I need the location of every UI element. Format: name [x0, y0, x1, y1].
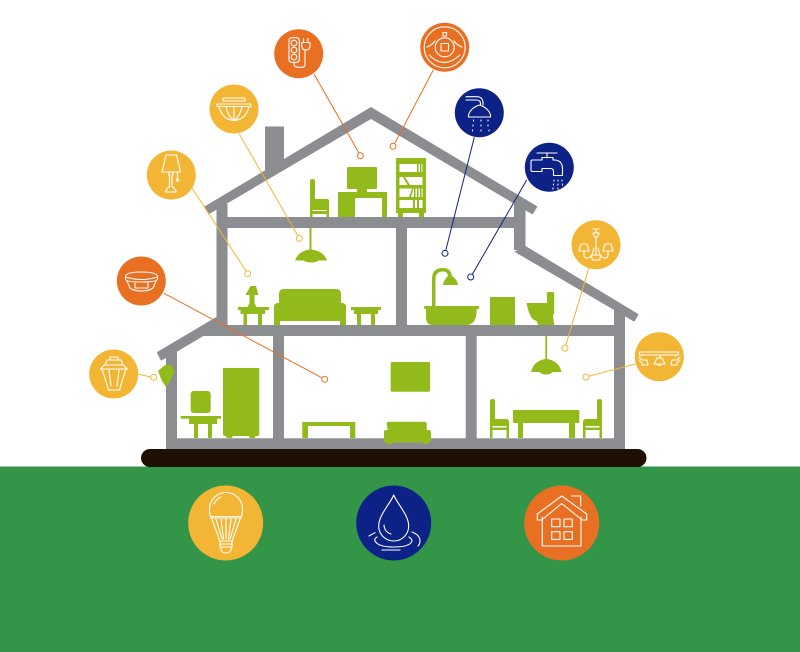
- bedroom table: [181, 416, 221, 438]
- connector: track light: [583, 364, 635, 380]
- connector: smoke detector: [164, 293, 328, 382]
- bathtub with shower: [424, 268, 479, 325]
- icon: wall lantern: [89, 350, 138, 398]
- ground floor furniture: [158, 362, 431, 444]
- foundation: dark base bar: [141, 449, 646, 467]
- attic furniture: [310, 158, 426, 217]
- icon: chandelier: [572, 220, 620, 269]
- ceiling lamp: [295, 228, 327, 262]
- right chair: [583, 399, 602, 438]
- bathroom fixtures: [424, 268, 554, 325]
- connector: ceiling lamp: [239, 134, 302, 241]
- icon: smoke detector: [117, 256, 166, 306]
- connector: faucet: [468, 180, 527, 280]
- ground: green lawn: [0, 466, 800, 652]
- bookshelf: [396, 158, 426, 217]
- icon: ceiling lamp: [210, 84, 258, 134]
- connector lines with end markers: [139, 70, 635, 382]
- connector: chandelier: [562, 268, 589, 351]
- connector: robot vacuum: [390, 70, 433, 149]
- icon: track light: [635, 332, 684, 381]
- connector: shower: [442, 137, 474, 256]
- icon: water drop: [356, 486, 431, 560]
- coffee table: [302, 422, 355, 438]
- dining room furniture: [490, 336, 602, 438]
- second floor living room furniture: [238, 228, 381, 325]
- icon: house: [524, 486, 599, 560]
- connector: wall lantern: [139, 374, 157, 380]
- icon: faucet: [525, 143, 574, 192]
- icon: shower: [455, 88, 504, 137]
- left chair: [490, 399, 509, 438]
- connector: table lamp: [192, 188, 251, 277]
- sofa: [274, 289, 346, 325]
- icon: table lamp: [147, 150, 196, 200]
- toilet: [526, 292, 554, 325]
- wardrobe: [223, 368, 259, 438]
- bedroom monitor: [191, 391, 211, 413]
- chair: [310, 179, 329, 217]
- icon: light bulb: [188, 486, 263, 560]
- icon: power strip: [274, 29, 323, 78]
- lounge sofa: [384, 422, 431, 444]
- connector: power strip: [314, 74, 363, 159]
- hanging lamp: [531, 336, 562, 374]
- desk and monitor: [338, 167, 387, 217]
- wall picture: [391, 362, 430, 392]
- dining table: [513, 410, 579, 438]
- side table: [351, 307, 381, 325]
- house structure: grey walls and roofs: [157, 107, 639, 450]
- table lamp on side table: [238, 286, 269, 325]
- icon: robot vacuum: [420, 23, 469, 72]
- cabinet: [490, 297, 515, 325]
- wall lantern: [158, 365, 175, 387]
